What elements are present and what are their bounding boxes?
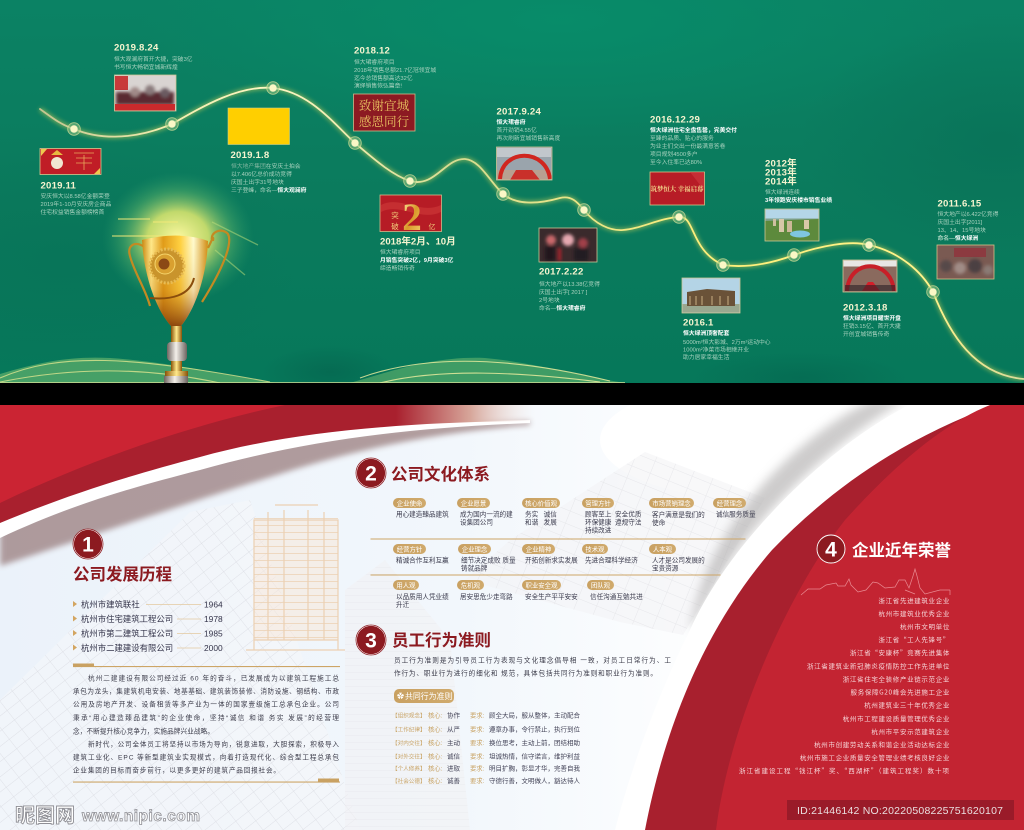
event: 2019.1.8 (228, 108, 307, 194)
culture row 2: 先进合理科学经济 (585, 556, 638, 564)
culture row 3: 升迁 (396, 600, 410, 609)
conduct table: 明目扩胸，彰显才华，完善自我 (489, 764, 580, 772)
conduct table: 核心: (428, 738, 443, 747)
photo: aerial (765, 209, 819, 241)
culture row 2 (393, 544, 705, 572)
history list: 1964 (204, 600, 223, 610)
honours list: 杭州市建筑业优秀企业 (878, 608, 950, 618)
number badge 3 (356, 625, 386, 655)
conduct table: 诚信 (447, 752, 460, 760)
conduct table: 换位思考，主动上前，团结相助 (489, 738, 580, 747)
number badge 4 (817, 535, 845, 563)
conduct table (392, 710, 580, 785)
label pill (394, 689, 454, 703)
event: 2016.12.29: 恒大绿洲住宅全盘售罄，完美交付 (650, 126, 737, 134)
conduct table: 核心: (428, 776, 443, 785)
number badge 2 (356, 458, 386, 488)
history list: 1985 (204, 628, 223, 638)
conduct table: 核心: (428, 724, 443, 734)
event: 2011.6.15: 恒大地产以6.422亿竞得 (938, 210, 999, 218)
event: 2018年2月、10月: 恒大珺睿府项目 (380, 248, 421, 256)
section 2: corporate culture (356, 458, 756, 609)
culture row 1: 管理方针 (585, 498, 611, 507)
conduct table: 坦诚热情，信守诺言，维护利益 (489, 752, 580, 760)
conduct table: 核心: (428, 710, 443, 720)
conduct table: 从严 (447, 726, 460, 734)
heading: 公司文化体系 (391, 464, 490, 484)
event: 2017.2.22: 2号地块 (539, 296, 560, 304)
number badge 1: 1 (82, 534, 94, 556)
photo: red arch (496, 147, 552, 180)
event: 2019.8.24 (114, 42, 193, 111)
heading: 公司发展历程 (73, 564, 172, 584)
conduct table: 守德行善，文明做人，豁达待人 (489, 776, 580, 785)
event: 2019.1.8: 2019.1.8 (230, 150, 270, 161)
company intro paragraph: 承包为龙头，集建筑机电安装、地基基础、建筑装饰装修、消防设施、钢结构、市政 (73, 686, 339, 696)
history list: 杭州市建筑联社 (81, 600, 140, 610)
conduct table: 顾全大局，服从整体，主动配合 (489, 710, 580, 720)
honours list: 浙江省“工人先锋号” (878, 634, 950, 644)
culture row 2: 经营方针 (397, 544, 423, 553)
honours list: 杭州市创建劳动关系和谐企业活动达标企业 (814, 739, 950, 749)
event: 2012–2014: 3年领跑安庆楼市销售业绩 (765, 196, 832, 204)
culture row 1: 用心建造臻品建筑 (396, 510, 449, 518)
timeline nodes (68, 82, 939, 298)
honours list: 杭州市施工企业质量安全管理业绩考核良好企业 (800, 752, 950, 762)
culture row 1: 市场营销理念 (652, 498, 691, 507)
honours list: 杭州建筑业三十年优秀企业 (864, 700, 950, 710)
banner: thanks (354, 94, 415, 131)
trophy cup (142, 236, 208, 326)
history list: 杭州市第二建筑工程公司 (81, 628, 173, 638)
black separator band (0, 383, 1024, 405)
image ID stamp: ID:21446142 NO:20220508225751620107 (797, 805, 1003, 817)
banner: thanks: 致谢宜城 (359, 99, 410, 113)
section 3: employee code of conduct (356, 625, 671, 785)
conduct table: 主动 (447, 738, 460, 747)
culture row 1: 诚信服务质量 (716, 510, 756, 518)
heading: 员工行为准则 (392, 631, 491, 650)
event: 2018年2月、10月 (380, 195, 456, 272)
event: 2016.12.29: 至臻的品质、贴心的服务 (650, 134, 714, 142)
event: 2019.1.8: 以7.406亿总价成功竞得 (231, 170, 292, 178)
conduct table: 核心: (428, 764, 443, 772)
company intro paragraph: 杭州二建建设有限公司经过近 60 年的奋斗，已发展成为以建筑工程施工总 (88, 674, 339, 682)
number badge 2: 2 (365, 462, 377, 486)
culture row 1: 核心价值观 (525, 498, 558, 507)
culture row 3: 危机观 (461, 580, 481, 589)
event: 2017.2.22: 恒大地产以13.38亿竞得 (539, 280, 600, 288)
event: 2019.11: 2019.11 (40, 180, 77, 192)
conduct table: 【工作纪律】 (392, 726, 426, 734)
culture row 2: 人才是公司发展的 (652, 556, 705, 564)
event: 2012.3.18: 2012.3.18 (843, 302, 888, 314)
banner: breakthrough 2: 2 (402, 196, 422, 239)
event: 2016.12.29: 项目规划4500多户 (650, 150, 698, 158)
banner: breakthrough 2 (380, 195, 442, 239)
event: 2012.3.18: 开创宜城销售传奇 (843, 330, 890, 338)
culture row 1: 务实 诚信 (525, 510, 557, 518)
company intro paragraph (73, 674, 339, 774)
event: 2012.3.18: 狂销3.15亿、首开大捷 (843, 322, 901, 330)
photo: clubhouse (682, 278, 740, 313)
event: 2012–2014: 恒大绿洲连续 (765, 188, 800, 196)
green timeline background (0, 0, 1024, 406)
event: 2018.12: 2018年销售总额21.7亿冠领宜城 (354, 66, 436, 74)
event: 2011.6.15: 13、14、15号地块 (938, 226, 986, 234)
number badge 3: 3 (365, 630, 377, 652)
event: 2016.12.29 (650, 114, 737, 205)
culture row 1: 顾客至上 安全优质 (585, 510, 642, 518)
culture row 2: 宝贵资源 (652, 564, 679, 572)
event: 2016.12.29: 为业主们交出一份最满意答卷 (650, 142, 726, 150)
event: 2016.1: 恒大绿洲顶奢配套 (683, 329, 730, 337)
culture row 1: 设集团公司 (460, 518, 493, 526)
honours list: 杭州市文明单位 (900, 621, 950, 631)
conduct table: 要求: (470, 752, 485, 760)
event: 2016.12.29: 2016.12.29 (650, 114, 700, 126)
event: 2016.1: 助力居家幸福生活 (683, 353, 730, 361)
event: 2012–2014 (765, 158, 832, 241)
culture row 3: 用人观 (396, 581, 416, 589)
conduct intro: 作行为、职业行为进行的细化和 规范，具体包括共同行为准则和职业行为准则。 (394, 668, 657, 678)
banner: dream: 筑梦恒大 幸福启幕 (651, 184, 704, 193)
trophy handles (129, 231, 229, 306)
culture row 2: 铸就品牌 (461, 564, 488, 572)
culture row 1: 企业愿景 (461, 498, 487, 507)
event: 2018年2月、10月: 2018年2月、10月 (380, 236, 456, 248)
site watermark: 昵图网 (15, 805, 75, 827)
honours list (739, 595, 950, 775)
lower panel background (0, 405, 909, 830)
culture row 1: 企业使命 (397, 498, 423, 507)
banner: breakthrough 2: 破 (391, 221, 399, 231)
conduct table: 【组织观念】 (392, 712, 426, 720)
photo: crowd event (114, 75, 176, 111)
site watermark (15, 805, 200, 827)
event: 2016.12.29: 至今入住率已达80% (650, 158, 702, 166)
top-left red swoosh (0, 405, 535, 566)
event: 2019.8.24: 2019.8.24 (114, 42, 159, 54)
culture row 1: 和谐 发展 (525, 518, 557, 526)
event: 2011.6.15: 命名—恒大绿洲 (938, 234, 978, 242)
banner: breakthrough 2: 突 (391, 210, 399, 220)
culture row 1: 使命 (652, 518, 666, 527)
culture row 2: 细节决定成败 质量 (461, 556, 516, 564)
company intro paragraph: 企业集团的目标而奋步前行，以更多更好的建筑产品回报社会。 (73, 766, 280, 774)
event: 2018.12: 迄今总销售额高达32亿 (354, 74, 413, 82)
event: 2017.9.24: 恒大珺睿府 (496, 118, 526, 126)
event: 2018年2月、10月: 月销售突破2亿，9月突破3亿 (380, 256, 454, 264)
event: 2011.6.15 (937, 198, 999, 279)
number badge 1 (73, 529, 103, 559)
conduct table: 核心: (428, 752, 443, 760)
culture row 3: 安全生产平平安安 (525, 592, 578, 601)
honours list: 浙江省先进建筑业企业 (878, 595, 950, 605)
history list (73, 600, 223, 653)
culture row 1 (393, 498, 756, 534)
trophy stem (171, 326, 182, 342)
culture row 2: 人本观 (653, 544, 673, 553)
label pill: ✿ (397, 692, 404, 700)
culture row 1: 持续改进 (585, 526, 612, 534)
conduct table: 要求: (470, 776, 485, 785)
culture row 3: 居安思危少走弯路 (460, 592, 513, 601)
culture row 3: 职业安全观 (526, 580, 558, 589)
conduct intro (394, 656, 671, 678)
culture row 3 (393, 580, 643, 609)
event: 2016.1: 2016.1 (683, 318, 714, 328)
photo: award banner (40, 148, 101, 174)
conduct table: 【对内交往】 (392, 739, 426, 747)
right red swoosh (615, 400, 1024, 830)
banner: breakthrough 2: 亿 (428, 222, 436, 231)
section 1: company history (73, 505, 345, 783)
event: 2017.9.24 (496, 106, 560, 180)
golden timeline curve (40, 88, 1024, 379)
company intro paragraph: 新时代，公司全体员工将坚持以市场为导向，锐意进取，大胆探索，积极导入 (88, 740, 339, 748)
event: 2019.1.8: 庆国土出字31号地块 (231, 178, 284, 186)
culture row 3: 团队观 (591, 580, 611, 589)
event: 2019.11: 住宅权益销售金额榜榜首 (40, 208, 104, 216)
event: 2012.3.18: 恒大绿洲项目耀世开盘 (843, 314, 901, 322)
conduct table: 诚善 (447, 776, 460, 785)
banner: thanks: 感恩同行 (359, 114, 410, 129)
photo: ceremony (539, 228, 597, 262)
conduct table: 要求: (470, 710, 485, 720)
event: 2012–2014: 2013年 (765, 166, 797, 178)
event: 2019.8.24: 恒大观澜府首开大捷，突破3亿 (114, 55, 193, 63)
event: 2011.6.15: 2011.6.15 (938, 198, 982, 210)
conduct table: 【社会公德】 (392, 777, 426, 785)
event: 2017.2.22: 庆国土出字[ 2017 ] (539, 288, 588, 296)
event: 2019.1.8: 三子登峰，命名—恒大观澜府 (231, 186, 307, 194)
honours list: 浙江省“安康杯”竞赛先进集体 (850, 647, 950, 657)
company intro paragraph: 建筑工业化、EPC 等新型建筑业实现模式，向着打造现代化、综合型工程总承包 (73, 752, 339, 762)
honours list: 服务保障G20峰会先进施工企业 (851, 686, 950, 696)
conduct table: 要求: (470, 724, 485, 734)
company intro paragraph: 念，不断提升核心竞争力，实施品牌兴业战略。 (73, 726, 214, 736)
event: 2016.1: 1000m²净菜市场相继开业 (683, 346, 749, 354)
event: 2017.9.24: 2017.9.24 (496, 106, 541, 118)
conduct table: 协作 (447, 710, 460, 720)
culture row 1: 客户满意是我们的 (652, 510, 705, 519)
culture row 1: 经营理念 (717, 498, 743, 507)
section 4: recent honours (739, 535, 952, 775)
honours list: 浙江省住宅全装修产业链示范企业 (843, 674, 950, 684)
event: 2012–2014: 2014年 (765, 176, 797, 188)
heading: 企业近年荣誉 (852, 540, 952, 560)
event: 2019.11 (40, 148, 112, 216)
photo: auction (937, 245, 994, 279)
conduct table: 【个人修养】 (392, 764, 426, 772)
event: 2019.8.24: 书写恒大畅销宜城新辉煌 (114, 63, 178, 71)
culture row 2: 企业精神 (526, 544, 551, 553)
honours list: 杭州市平安示范建筑企业 (871, 726, 950, 736)
event: 2018年2月、10月: 缔造畅销传奇 (380, 264, 415, 272)
culture row 2: 开拓创新求实发展 (525, 556, 578, 564)
honours list: 浙江省建筑业新冠肺炎疫情防控工作先进单位 (807, 660, 950, 670)
event: 2017.2.22 (539, 228, 600, 312)
conduct table: 【对外交往】 (392, 752, 426, 760)
conduct intro: 员工行为准则是为引导员工行为表现与文化理念倡导相 一致，对员工日常行为、工 (394, 656, 671, 664)
number badge 4: 4 (825, 538, 837, 562)
event: 2018.12: 恒大珺睿府项目 (354, 58, 395, 66)
culture row 3: 信任沟通互勉共进 (590, 592, 643, 601)
culture row 1: 成为国内一流的建 (460, 510, 513, 518)
event: 2018.12: 2018.12 (354, 46, 390, 56)
event: 2012–2014: 2012年 (765, 158, 797, 170)
honours list: 杭州市工程建设质量管理优秀企业 (843, 713, 950, 723)
event: 2018.12 (354, 46, 436, 131)
tower line drawing (246, 505, 345, 650)
conduct table: 遵章办事，令行禁止，执行到位 (489, 724, 580, 734)
skyline outline (801, 569, 950, 595)
conduct table: 要求: (470, 764, 485, 772)
event: 2017.9.24: 首开劲销4.55亿 (496, 126, 537, 134)
photo: arch (843, 260, 897, 292)
culture row 1: 环保健康 遵规守法 (585, 518, 642, 526)
culture row 2: 技术观 (585, 544, 605, 553)
event: 2018.12: 演绎销售恢弘篇章! (354, 82, 402, 90)
history list: 2000 (204, 643, 223, 653)
history list: 1978 (204, 614, 223, 624)
event: 2019.11: 安庆恒大以8.58亿金额荣登 (40, 192, 110, 200)
culture row 2: 精诚合作互利互赢 (396, 556, 449, 564)
event: 2016.1 (682, 278, 771, 361)
event: 2017.2.22: 2017.2.22 (539, 266, 583, 278)
culture row 2: 企业理念 (462, 544, 488, 553)
event: 2017.9.24: 再次刷新宜城销售新高度 (496, 134, 560, 142)
event: 2012.3.18 (843, 260, 901, 338)
image ID stamp (787, 800, 1014, 820)
conduct table: 进取 (447, 764, 460, 772)
event: 2019.11: 2019年1-10月安庆房企商品 (40, 200, 112, 208)
event: 2011.6.15: 庆国土出字[2011] (938, 218, 983, 226)
event: 2017.2.22: 命名—恒大珺睿府 (539, 304, 586, 312)
event: 2016.1: 5000m²恒大影城、2万m²运动中心 (683, 338, 771, 346)
redaction block: yellow (228, 108, 290, 144)
culture row 3: 以品质用人凭业绩 (396, 592, 449, 601)
history list: 杭州市住宅建筑工程公司 (81, 614, 173, 624)
site watermark: www.nipic.com (81, 808, 200, 825)
label pill: 共同行为准则 (405, 691, 452, 701)
company intro paragraph: 公用及房地产开发、设备租赁等多产业为一体的国家壹级施工总承包企业。公司 (73, 700, 339, 708)
history list: 杭州市二建建设有限公司 (81, 643, 173, 653)
company intro paragraph: 秉承“用心建造臻品建筑”的企业使命，坚持“诚信 和谐 务实 发展”的经营理 (73, 713, 339, 722)
trophy (102, 172, 258, 383)
conduct table: 要求: (470, 738, 485, 747)
event: 2019.1.8: 恒大地产集团在安庆土拍会 (231, 162, 301, 170)
honours list: 浙江省建设工程“钱江杯”奖、“西湖杯”（建筑工程奖）数十项 (739, 765, 950, 775)
